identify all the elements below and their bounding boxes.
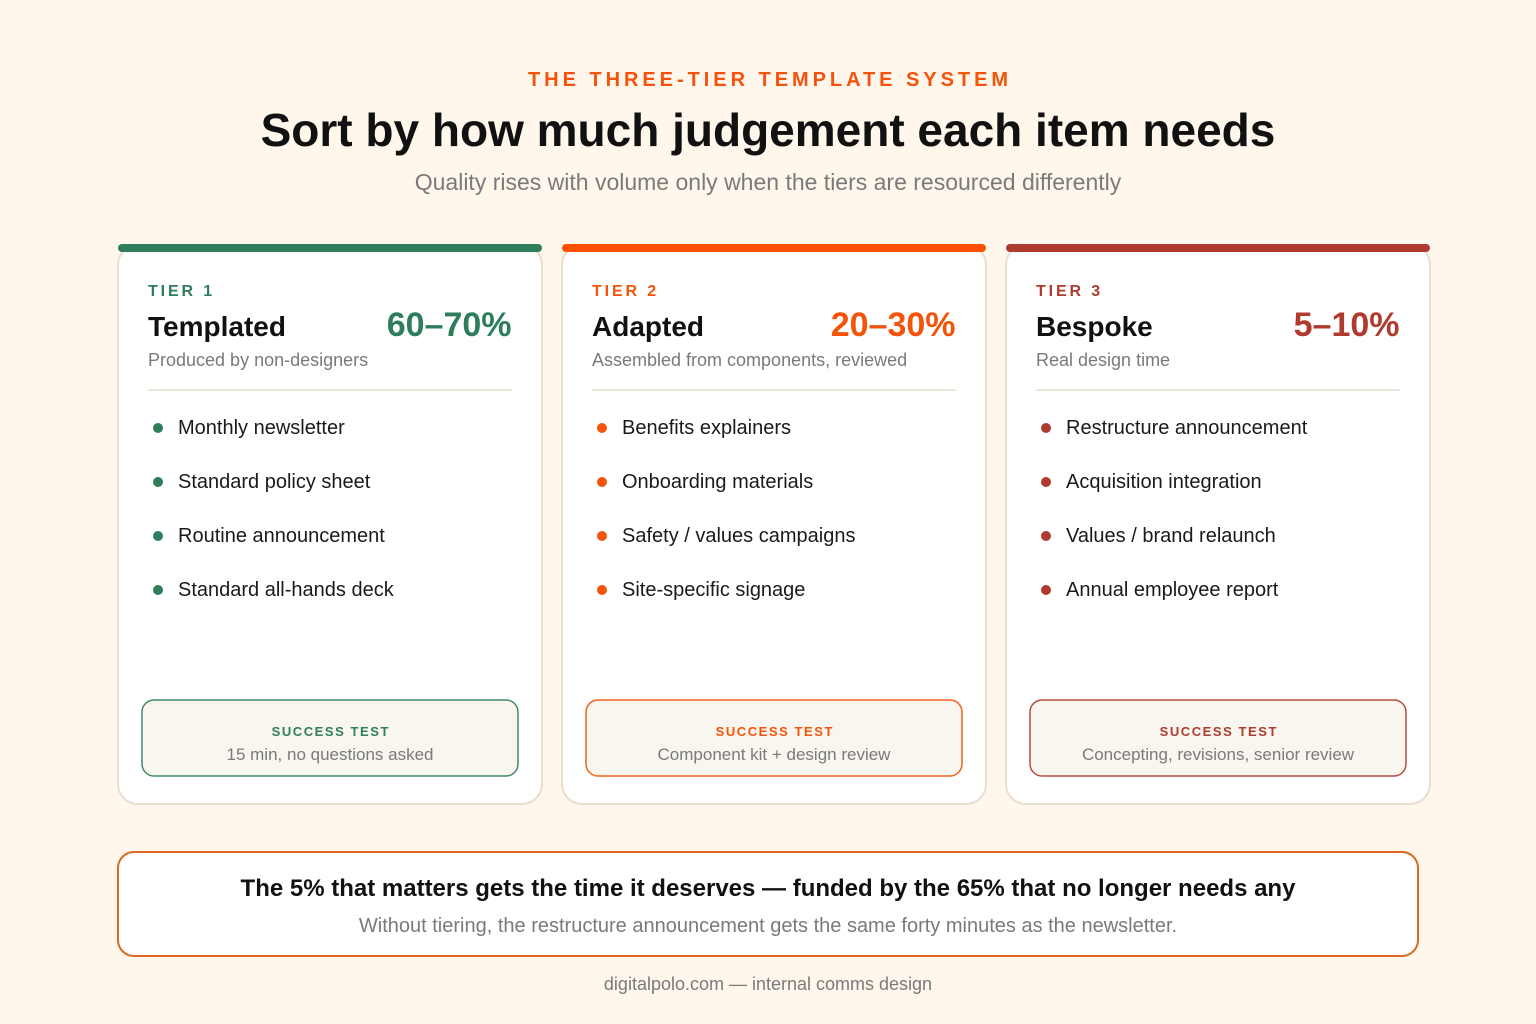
tier 1 share: 60–70% <box>387 306 512 344</box>
tier 1 description: Produced by non-designers <box>148 350 368 370</box>
tier 2 name: Adapted <box>592 311 704 342</box>
callout heading: The 5% that matters gets the time it deserves — funded by the 65% that no longer needs any <box>241 875 1296 902</box>
tier 3 success test <box>1030 700 1406 776</box>
tier 1 list: Standard policy sheet <box>178 471 371 493</box>
panel: tier 2 <box>562 244 986 804</box>
tier 2 list: Onboarding materials <box>622 471 813 493</box>
footer: digitalpolo.com — internal comms design <box>604 974 932 994</box>
subtitle: Quality rises with volume only when the tiers are resourced differently <box>415 169 1122 195</box>
tier 1 list: Routine announcement <box>178 525 385 547</box>
tier 2 label: TIER 2 <box>592 283 659 300</box>
tier 3 list <box>1041 417 1308 601</box>
tier 3 label: TIER 3 <box>1036 283 1103 300</box>
tier 2 list: Site-specific signage <box>622 579 805 601</box>
tier 3 top bar <box>1006 244 1430 252</box>
callout text: Without tiering, the restructure announcement gets the same forty minutes as the newsletter. <box>359 915 1177 937</box>
tier 2 list: Safety / values campaigns <box>622 525 855 547</box>
tier 1 success test <box>142 700 518 776</box>
tier 2 description: Assembled from components, reviewed <box>592 350 907 370</box>
tier 3 share: 5–10% <box>1294 306 1400 344</box>
tier 2 success test: SUCCESS TEST <box>716 724 834 739</box>
tier 1 list: Monthly newsletter <box>178 417 345 439</box>
tier 3 list: Annual employee report <box>1066 579 1279 601</box>
tier 2 top bar <box>562 244 986 252</box>
tier 2 list <box>597 417 855 601</box>
tier 1 success test: SUCCESS TEST <box>272 724 390 739</box>
tier 1 list: Standard all-hands deck <box>178 579 395 601</box>
tier 2 success test: Component kit + design review <box>658 745 891 764</box>
tier 1 name: Templated <box>148 311 286 342</box>
tier 3 list: Acquisition integration <box>1066 471 1262 493</box>
tier 3 success test: SUCCESS TEST <box>1160 724 1278 739</box>
callout <box>118 852 1418 956</box>
tier 3 list: Restructure announcement <box>1066 417 1308 439</box>
title: Sort by how much judgement each item needs <box>261 104 1275 156</box>
tier 2 success test <box>586 700 962 776</box>
panel: tier 3 <box>1006 244 1430 804</box>
panel: tier 1 <box>118 244 542 804</box>
tier 1 success test: 15 min, no questions asked <box>227 745 433 764</box>
tier 3 list: Values / brand relaunch <box>1066 525 1276 547</box>
tier 2 list: Benefits explainers <box>622 417 791 439</box>
tier 3 success test: Concepting, revisions, senior review <box>1082 745 1355 764</box>
tier 1 top bar <box>118 244 542 252</box>
tier 3 description: Real design time <box>1036 350 1170 370</box>
eyebrow: THE THREE-TIER TEMPLATE SYSTEM <box>528 69 1012 91</box>
tier 3 name: Bespoke <box>1036 311 1153 342</box>
tier 2 share: 20–30% <box>831 306 956 344</box>
tier 1 list <box>153 417 395 601</box>
tier 1 label: TIER 1 <box>148 283 215 300</box>
